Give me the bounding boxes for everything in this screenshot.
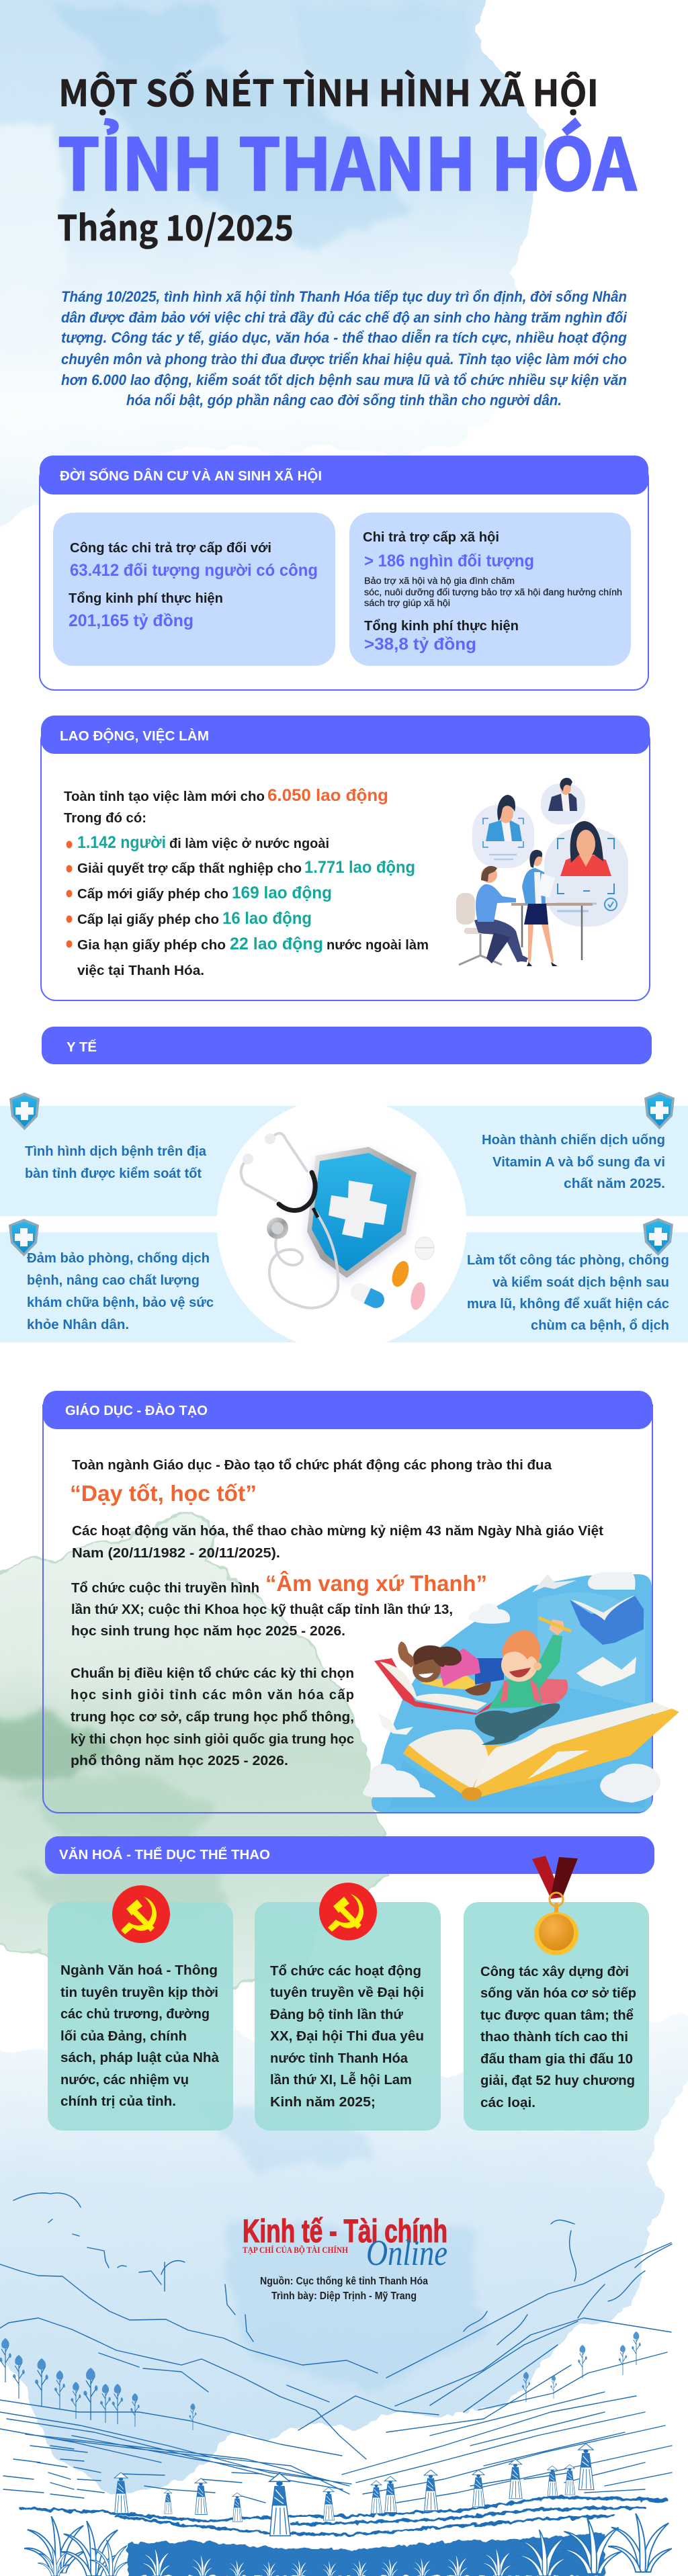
card: trợ cấp xã hội: Chi trả trợ cấp xã hội (363, 530, 499, 545)
farmers (114, 2444, 594, 2536)
logo: kinh tế - tài chính online: Kinh tế - Tài chính (243, 2214, 447, 2249)
employment text: 6.050 lao động (267, 786, 388, 805)
education text: Chuẩn bị điều kiện tổ chức các kỳ thi chọn (71, 1666, 354, 1681)
card: đời sống văn hóa cơ sở: giải, đạt 52 huy chương (480, 2073, 635, 2088)
source credits: Trình bày: Diệp Trịnh - Mỹ Trang (271, 2290, 417, 2302)
heading bar (45, 1836, 654, 1874)
title line 1: MỘT SỐ NÉT TÌNH HÌNH XÃ HỘI (58, 64, 599, 117)
terrace lines right (342, 2392, 672, 2503)
card: người có công: Tổng kinh phí thực hiện (69, 591, 223, 606)
card: đời sống văn hóa cơ sở (464, 1856, 649, 2131)
flying blue book (570, 1596, 644, 1645)
text: top-right: Vitamin A và bổ sung đa vi (492, 1155, 665, 1170)
terrace lines left (0, 2412, 351, 2503)
card: ngành văn hoá: các chủ trương, đường (60, 2007, 210, 2022)
intro paragraph (61, 288, 628, 409)
employment text (64, 786, 429, 978)
logo: kinh tế - tài chính online: TẠP CHÍ CỦA BỘ TÀI CHÍNH (243, 2245, 348, 2255)
education text: học sinh trung học năm học 2025 - 2026. (71, 1624, 345, 1639)
intro paragraph: chuyên môn và phong trào thi đua được triển khai hiệu quả. Tỉnh tạo việc làm mới cho (61, 351, 627, 368)
education text: Tổ chức cuộc thi truyền hình (71, 1581, 259, 1596)
text: bottom-left: khỏe Nhân dân. (27, 1318, 129, 1332)
intro paragraph: hơn 6.000 lao động, kiểm soát tốt dịch bệnh sau mưa lũ và tổ chức nhiều sự kiện văn (61, 372, 627, 388)
source credits: Nguồn: Cục thống kê tỉnh Thanh Hóa (260, 2276, 428, 2287)
logo: kinh tế - tài chính online: Online (366, 2233, 447, 2273)
employment text: Gia hạn giấy phép cho (77, 938, 226, 953)
card: trợ cấp xã hội: >38,8 tỷ đồng (364, 635, 476, 654)
highlight: dạy tốt, học tốt: “Dạy tốt, học tốt” (70, 1481, 257, 1506)
employment text: 169 lao động (232, 884, 332, 902)
watercolor wash: top blue (0, 0, 544, 531)
card: người có công: 63.412 đối tượng người có công (70, 561, 318, 580)
mountain ridges (0, 2264, 378, 2373)
watercolor wash: green (0, 1516, 386, 2018)
card: người có công: Công tác chi trả trợ cấp đối với (70, 541, 271, 556)
card: đại hội: Đảng bộ tỉnh lần thứ (270, 2008, 404, 2022)
education text: Toàn ngành Giáo dục - Đào tạo tổ chức phát động các phong trào thi đua (72, 1458, 552, 1473)
heading: ĐỜI SỐNG DÂN CƯ VÀ AN SINH XÃ HỘI (60, 468, 322, 484)
text: bottom-left (27, 1251, 214, 1332)
card: đại hội: XX, Đại hội Thi đua yêu (270, 2029, 424, 2044)
ragged ground bands (19, 2497, 667, 2535)
card: đại hội: Tổ chức các hoạt động (270, 1964, 421, 1979)
text: top-left (25, 1144, 207, 1181)
source credits (260, 2276, 428, 2302)
panel: giáo dục - đào tạo (43, 1391, 679, 1813)
card: ngành văn hoá: lối của Đảng, chính (60, 2029, 187, 2044)
education text: Các hoạt động văn hóa, thể thao chào mừng kỷ niệm 43 năm Ngày Nhà giáo Việt (72, 1524, 603, 1539)
title (57, 64, 637, 251)
text: bottom-right: Làm tốt công tác phòng, chống (467, 1253, 669, 1268)
heading: GIÁO DỤC - ĐÀO TẠO (65, 1403, 208, 1418)
card: người có công: 201,165 tỷ đồng (69, 611, 194, 630)
intro paragraph: hóa nổi bật, góp phần nâng cao đời sống tinh thần cho người dân. (126, 392, 562, 409)
text: bottom-left: Đảm bảo phòng, chống dịch (27, 1251, 210, 1266)
heading: Y TẾ (67, 1039, 97, 1055)
education text: lần thứ XX; cuộc thi Khoa học kỹ thuật cấp tỉnh lần thứ 13, (71, 1602, 453, 1617)
text: bottom-right: chùm ca bệnh, ổ dịch (531, 1318, 669, 1333)
title line 3: date: Tháng 10/2025 (57, 200, 294, 251)
blue sky shape (372, 1574, 652, 1812)
icon: medal (532, 1856, 578, 1955)
trees left (0, 2338, 196, 2430)
highlight: âm vang xứ thanh: “Âm vang xứ Thanh” (265, 1571, 487, 1596)
card: đời sống văn hóa cơ sở: thao thành tích cao thi (480, 2030, 628, 2045)
text: bottom-left: bệnh, nâng cao chất lượng (27, 1273, 200, 1288)
employment text: 22 lao động (230, 935, 323, 953)
card: ngành văn hoá: sách, pháp luật của Nhà (60, 2051, 220, 2065)
heading bar (42, 1027, 652, 1064)
clouds (588, 1572, 636, 1590)
card: đời sống văn hóa cơ sở: tục được quan tâm; thể (480, 2008, 634, 2023)
education text: kỳ thi chọn học sinh giỏi quốc gia trung học (71, 1732, 354, 1747)
text: top-left: Tình hình dịch bệnh trên địa (25, 1144, 207, 1159)
card: đời sống văn hóa cơ sở: Công tác xây dựng đời (480, 1965, 629, 1979)
employment text: Cấp mới giấy phép cho (77, 887, 228, 902)
illustration: children flying on books (363, 1572, 679, 1812)
employment text: Cấp lại giấy phép cho (77, 912, 219, 927)
icon: shield top-right (644, 1092, 675, 1129)
panel: y tế (0, 1027, 688, 1350)
card: ngành văn hoá (48, 1885, 233, 2131)
education text (71, 1458, 603, 1768)
illustration: recruitment people (456, 778, 628, 966)
card: đời sống văn hóa cơ sở: các loại. (480, 2096, 535, 2110)
boy (526, 1678, 568, 1703)
icon: shield bottom-left (9, 1219, 39, 1256)
icon: party emblem (319, 1883, 377, 1940)
text: bottom-right: và kiểm soát dịch bệnh sau (492, 1275, 669, 1290)
girl on red book (374, 1658, 501, 1715)
card: đại hội: nước tỉnh Thanh Hóa (270, 2051, 408, 2066)
illustration: shield, stethoscope and pills (241, 1133, 434, 1312)
logo: kinh tế - tài chính online (243, 2214, 447, 2273)
center circle (216, 1098, 466, 1350)
card: trợ cấp xã hội (349, 513, 631, 666)
card: trợ cấp xã hội: sách trợ giúp xã hội (364, 598, 450, 608)
icon: shield top-left (9, 1092, 40, 1130)
education text: trung học cơ sở, cấp trung học phổ thông, (71, 1710, 354, 1725)
panel: văn hoá - thể dục thể thao (45, 1836, 654, 2131)
card: ngành văn hoá: nước, các nhiệm vụ (60, 2073, 189, 2088)
card: đại hội: lần thứ XI, Lễ hội Lam (270, 2071, 412, 2088)
card: đời sống văn hóa cơ sở: sống văn hóa cơ sở tiếp (480, 1986, 636, 2001)
card: đại hội (255, 1883, 441, 2131)
title line 2: TỈNH THANH HÓA (58, 108, 637, 211)
heading: LAO ĐỘNG, VIỆC LÀM (60, 728, 209, 744)
employment text: Trong đó có: (64, 811, 146, 826)
intro paragraph: Tháng 10/2025, tình hình xã hội tỉnh Thanh Hóa tiếp tục duy trì ổn định, đời sống Nhân (61, 288, 627, 305)
employment text: Toàn tỉnh tạo việc làm mới cho (64, 789, 265, 804)
text: top-left: bàn tỉnh được kiểm soát tốt (25, 1166, 202, 1181)
card: đại hội: Kinh năm 2025; (270, 2095, 376, 2110)
panel header (41, 716, 650, 754)
employment text: nước ngoài làm (327, 938, 429, 953)
card: đại hội: tuyên truyền về Đại hội (270, 1985, 424, 2000)
trees right (522, 2331, 641, 2402)
card: trợ cấp xã hội: sóc, nuôi dưỡng đối tượng bảo trợ xã hội đang hưởng chính (364, 587, 622, 597)
big open yellow book (403, 1709, 679, 1797)
education text: học sinh giỏi tỉnh các môn văn hóa cấp (71, 1688, 354, 1703)
employment text: 16 lao động (222, 909, 312, 928)
employment text: Giải quyết trợ cấp thất nghiệp cho (77, 861, 302, 876)
education text: Nam (20/11/1982 - 20/11/2025). (72, 1546, 280, 1561)
landscape line art: mountains, terraces, farmers and crops (0, 2193, 672, 2576)
text: bottom-left: khám chữa bệnh, bảo vệ sức (27, 1295, 214, 1310)
card: đời sống văn hóa cơ sở: đấu tham gia thi đấu 10 (480, 2052, 633, 2067)
card: ngành văn hoá: tin tuyên truyền kịp thời (60, 1985, 218, 2000)
text: bottom-right (467, 1253, 669, 1333)
panel header (40, 456, 648, 495)
intro paragraph: tượng. Công tác y tế, giáo dục, văn hóa - thể thao diễn ra tích cực, nhiều hoạt động (61, 329, 628, 346)
text: top-right: chất năm 2025. (564, 1176, 665, 1191)
employment text: việc tại Thanh Hóa. (77, 963, 204, 978)
text: bottom-right: mưa lũ, không để xuất hiện các (467, 1297, 669, 1312)
intro paragraph: dân được đảm bảo với việc chi trả đầy đủ các chế độ an sinh cho hàng trăm nghìn đối (61, 309, 628, 326)
employment text: 1.142 người (77, 833, 166, 852)
panel header (43, 1391, 652, 1429)
card: trợ cấp xã hội: > 186 nghìn đối tượng (364, 552, 534, 570)
icon: party emblem (112, 1885, 170, 1943)
panel: lao động, việc làm (41, 716, 650, 1000)
panel: đời sống dân cư và an sinh xã hội (40, 456, 648, 690)
watercolor wash: bottom blue (0, 2016, 688, 2491)
card: ngành văn hoá: Ngành Văn hoá - Thông (60, 1963, 218, 1978)
education text: phổ thông năm học 2025 - 2026. (71, 1754, 288, 1768)
text: top-right (482, 1133, 665, 1191)
crops (24, 2514, 672, 2576)
employment text: đi làm việc ở nước ngoài (169, 836, 329, 851)
cloud strokes (13, 2193, 672, 2345)
employment text: 1.771 lao động (304, 858, 415, 877)
loose papers (576, 1657, 636, 1686)
card: trợ cấp xã hội: Bảo trợ xã hội và hộ gia đình chăm (364, 576, 515, 586)
card: người có công (53, 513, 335, 666)
card: ngành văn hoá: chính trị của tỉnh. (60, 2094, 176, 2109)
heading: VĂN HOÁ - THỂ DỤC THỂ THAO (59, 1847, 270, 1862)
icon: shield bottom-right (643, 1218, 673, 1256)
card: trợ cấp xã hội: Tổng kinh phí thực hiện (364, 619, 519, 634)
health strips (0, 1106, 688, 1342)
text: top-right: Hoàn thành chiến dịch uống (482, 1133, 665, 1148)
